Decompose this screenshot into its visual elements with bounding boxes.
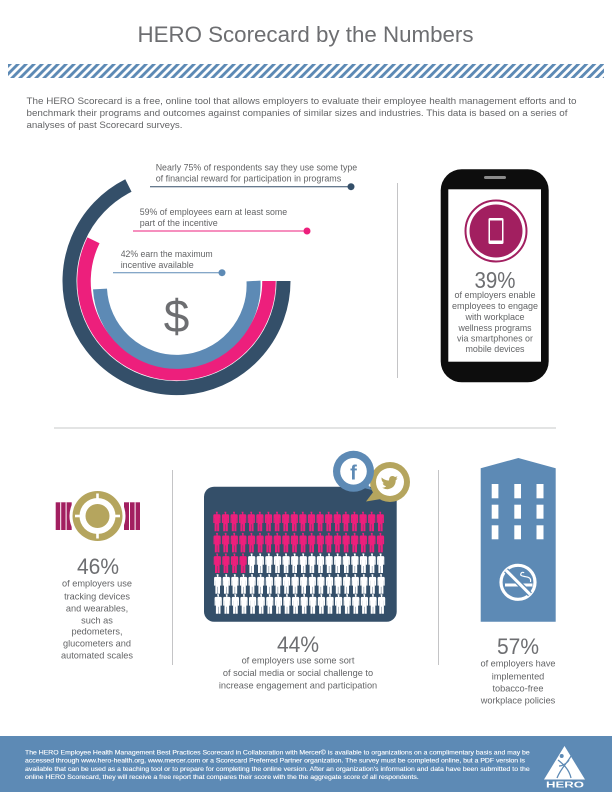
intro text: analyses of past Scorecard surveys. — [26, 120, 182, 130]
text: smartphone description: wellness programs — [458, 323, 532, 333]
footer text: The HERO Employee Health Management Best Practices Scorecard in Collaboration with Mercer© is available to organizations on a complimentary basis and may be — [25, 748, 530, 756]
text: wearables description: and wearables, — [66, 604, 128, 614]
footer text: available that can be used as a teaching tool or to prepare for completing the online version. After an organization's information and data have been submitted to the — [25, 766, 530, 773]
intro text: benchmark their programs and outcomes against companies of similar sizes and industries. This data is based on a series of — [26, 108, 568, 118]
stat: 44 percent: 44% — [277, 632, 319, 657]
ring: 42 percent — [100, 281, 254, 362]
text: wearables description: glucometers and — [63, 638, 131, 648]
text: smartphone description: of employers enable — [454, 290, 536, 300]
icon: building — [481, 458, 556, 622]
panel: social media statistic — [204, 451, 410, 690]
icon: HERO logo — [544, 746, 585, 790]
footer text: online HERO Scorecard, they will receive a free report that compares their score with the the aggregate score of all respondents. — [25, 774, 419, 781]
callout: 59 percent: 59% of employees earn at least some — [140, 207, 287, 217]
text: smartphone description: employees to engage — [452, 301, 538, 311]
callout: 42 percent: 42% earn the maximum — [121, 249, 213, 259]
icon: twitter bubble — [366, 462, 410, 502]
text: wearables description: pedometers, — [71, 626, 123, 636]
icon: facebook bubble: f — [350, 462, 357, 484]
text: wearables description: automated scales — [61, 650, 133, 660]
stat: 57 percent: 57% — [497, 634, 539, 659]
text: tobacco description: implemented — [492, 672, 544, 682]
callout: 59 percent — [133, 207, 310, 234]
text: tobacco description: of employers have — [480, 658, 556, 668]
panel: financial incentive radial chart — [70, 163, 357, 388]
intro text: The HERO Scorecard is a free, online tool that allows employers to evaluate their employee health management efforts and to — [26, 96, 576, 106]
callout: 75 percent — [150, 163, 357, 190]
callout: 59 percent: part of the incentive — [140, 218, 218, 228]
icon: mobile badge — [466, 200, 526, 262]
text: smartphone description — [452, 290, 538, 354]
striped banner — [8, 64, 604, 78]
text: smartphone description: via smartphones or — [457, 334, 533, 344]
icon: dollar sign: $ — [164, 290, 189, 342]
ring: 59 percent — [84, 240, 269, 374]
panel: wearables statistic — [56, 488, 140, 660]
text: smartphone description: with workplace — [465, 312, 524, 322]
icon: HERO logo: HERO — [546, 780, 584, 790]
icon: facebook bubble — [333, 451, 374, 492]
intro text — [26, 96, 576, 130]
callout: 75 percent: of financial reward for participation in programs — [156, 174, 342, 184]
text: social media description — [219, 656, 377, 690]
text: wearables description: tracking devices — [64, 592, 130, 602]
stat: 39 percent: 39% — [474, 267, 516, 293]
footer band — [0, 736, 612, 792]
text: wearables description — [61, 578, 133, 660]
text: tobacco description: tobacco-free — [492, 684, 544, 694]
footer text: accessed through www.hero-health.org, www.mercer.com or a Scorecard Preferred Partner organization. The survey must be completed online, but a PDF version is — [25, 758, 526, 764]
text: social media description: of employers use some sort — [242, 656, 355, 666]
text: wearables description: of employers use — [62, 578, 132, 588]
footer text — [25, 748, 530, 781]
people grid panel — [204, 487, 397, 622]
stat: 46 percent: 46% — [77, 554, 119, 579]
text: smartphone description: mobile devices — [466, 344, 525, 354]
callout: 75 percent: Nearly 75% of respondents say they use some type — [156, 163, 357, 173]
panel: tobacco-free statistic — [480, 458, 556, 706]
text: wearables description: such as — [81, 616, 113, 626]
icon: no smoking — [501, 565, 535, 599]
icon: wearable device — [56, 488, 140, 544]
text: social media description: of social media or social challenge to — [223, 668, 373, 678]
callout: 42 percent: incentive available — [121, 260, 194, 270]
ring: 75 percent — [70, 186, 284, 388]
icon: phone body — [441, 169, 549, 382]
panel: smartphone statistic — [441, 169, 549, 382]
callout: 42 percent — [113, 249, 226, 276]
pictogram: 100 people, 44 highlighted — [213, 512, 385, 614]
text: social media description: increase engagement and participation — [219, 680, 377, 690]
text: tobacco description — [480, 658, 556, 706]
text: tobacco description: workplace policies — [480, 696, 556, 706]
title: HERO Scorecard by the Numbers — [138, 22, 474, 47]
